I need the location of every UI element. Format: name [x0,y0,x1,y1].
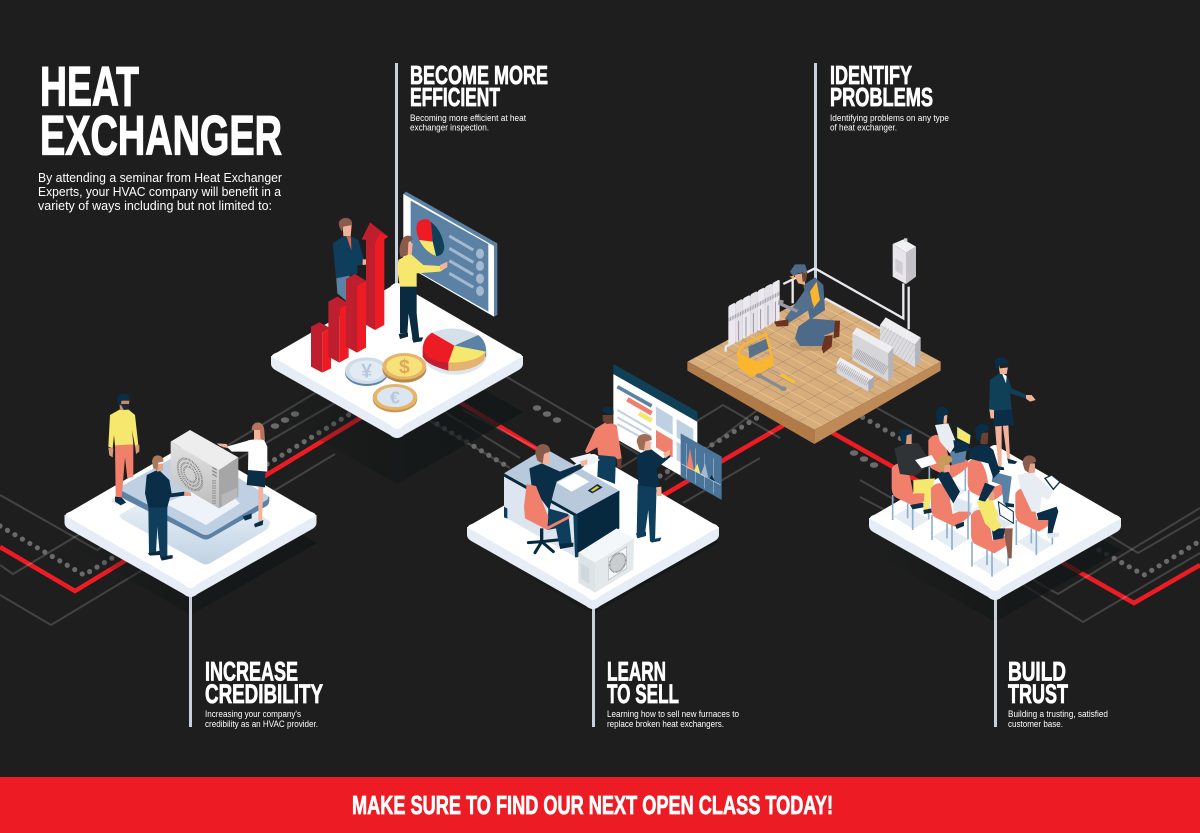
scene: air conditioner inspection [108,394,270,564]
chair middle row left [892,463,932,530]
panel: become more efficient platform [271,192,523,438]
text block: learn to sell: LEARN [607,656,666,686]
figure: person pointing at display [636,434,671,543]
figure: student with white laptop [977,483,1013,558]
panel: learn to sell platform [467,364,722,609]
text block: build trust: BUILD [1008,656,1066,686]
white pipes [726,268,909,352]
figure: student in dark shirt [894,429,937,514]
connector post: become more efficient [395,63,398,295]
text block: become more efficient: Becoming more efficient at heat [410,113,527,123]
text block: build trust: TRUST [1008,679,1068,709]
intro text: variety of ways including but not limited to: [38,199,272,213]
figure: student with blonde hair [937,455,972,529]
figure: man in yellow sweater [108,394,139,505]
text block: become more efficient: exchanger inspection. [410,122,489,132]
text block: increase credibility [205,656,323,729]
panel: increase credibility platform [64,394,316,597]
text block: increase credibility: INCREASE [205,656,298,686]
connector post: increase credibility [189,595,192,727]
connector post: learn to sell [592,605,595,727]
platform shadows [65,340,1121,622]
text block: increase credibility: credibility as an HVAC provider. [205,719,318,729]
icon: yen coin [345,357,388,386]
chair back row center [968,458,1008,525]
panel: identify problems wood platform scene [687,238,941,444]
connector post: identify problems [814,63,817,288]
title: EXCHANGER [40,104,282,166]
circuit lines background [0,373,1200,625]
platform slab [64,442,316,597]
icon: small ac unit [578,528,634,593]
figure: woman presenting [397,236,447,343]
text block: identify problems [830,62,949,132]
title [40,54,282,166]
call to action banner [0,777,1200,833]
text block: identify problems: of heat exchanger. [830,122,897,132]
platform slab [271,283,523,438]
text block: learn to sell: TO SELL [607,679,679,709]
figure: kneeling worker [774,264,840,353]
chair front row [971,510,1011,577]
title: HEAT [40,54,139,118]
intro text: By attending a seminar from Heat Exchanger [38,171,282,185]
intro text [38,171,282,213]
scene: seminar class [892,358,1060,577]
text block: learn to sell: Learning how to sell new furnaces to [607,709,739,719]
pie chart [423,329,487,375]
text block: build trust: customer base. [1008,719,1063,729]
icon: dollar coin [382,353,426,383]
figure: man in suit [333,218,372,301]
text block: identify problems: Identifying problems on any type [830,113,949,123]
text block: learn to sell: replace broken heat exchangers. [607,719,724,729]
icon: boiler [893,238,916,284]
text block: learn to sell [607,656,739,729]
text block: build trust [1008,656,1108,729]
office desk [504,448,619,557]
figure: student with yellow laptop [935,407,971,465]
text block: identify problems: IDENTIFY [830,62,912,90]
icon: yen coin: ¥ [361,361,372,382]
icon: dollar coin: $ [399,357,410,378]
intro text: Experts, your HVAC company will benefit in a [38,185,281,199]
text block: identify problems: PROBLEMS [830,84,933,112]
bar chart with rising arrow [311,222,388,373]
icon: wrench and screwdriver [756,368,793,391]
text block: increase credibility: CREDIBILITY [205,679,323,709]
text block: build trust: Building a trusting, satisfied [1008,709,1108,719]
icon: outdoor ac unit [171,430,238,508]
text block: become more efficient: EFFICIENT [410,84,500,112]
scene: presentation [311,192,497,412]
icon: toolbox [738,334,773,377]
stand plate [119,448,269,539]
stand shadow [119,470,270,564]
platform slab [467,454,719,609]
connector post: build trust [994,597,997,727]
chair back row left [928,435,968,502]
scene: sales office [504,364,722,593]
text block: become more efficient: BECOME MORE [410,62,548,90]
figure: seated salesperson with chair [524,444,587,553]
icon: euro coin: € [390,388,400,408]
figure: man in navy sweater [145,455,191,561]
icon: convector heater [852,327,893,382]
panel: build trust platform [869,358,1121,600]
wood platform [687,293,941,444]
text block: become more efficient [410,62,548,132]
icon: euro coin [373,384,417,412]
chair middle row center [931,483,971,550]
presentation screen [403,192,497,317]
call to action banner: MAKE SURE TO FIND OUR NEXT OPEN CLASS TODAY! [352,790,833,820]
figure: person in salmon sweater [585,407,622,484]
wall display [613,364,697,485]
platform slab [869,445,1121,600]
chair middle row right [1015,488,1055,555]
icon: small radiator [837,357,874,392]
figure: woman in white top [217,422,267,527]
figure: student with tablet [1018,455,1060,538]
figure: presenter [989,358,1036,470]
chart panel [681,433,722,500]
icon: large radiator [880,317,921,367]
figure: student in navy sweater [968,424,1014,507]
text block: increase credibility: Increasing your company's [205,709,302,719]
icon: left radiator [728,279,780,347]
